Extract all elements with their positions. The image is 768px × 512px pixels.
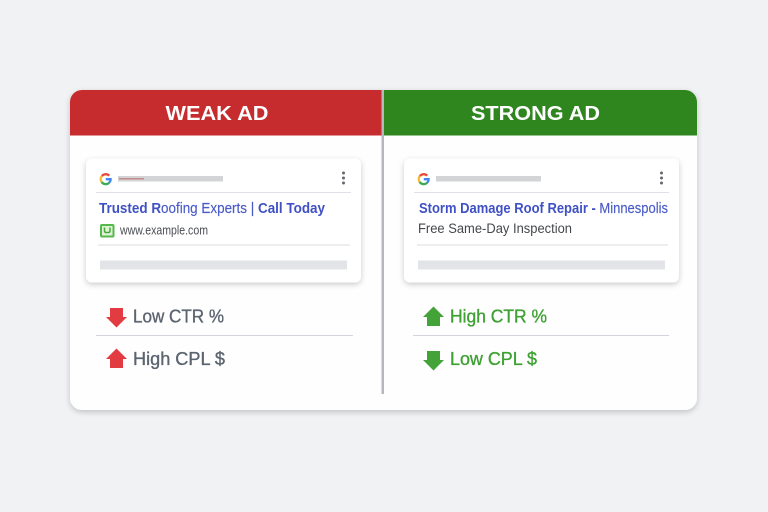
garbled red mark	[119, 178, 144, 180]
ad headline: Storm Damage Roof Repair - Minnespolis	[419, 201, 668, 217]
icon: red down arrow	[106, 308, 127, 328]
header: strong ad: STRONG AD	[471, 102, 600, 125]
metric: high CTR: High CTR %	[450, 306, 547, 326]
url placeholder bar	[436, 176, 541, 182]
header: strong ad	[384, 90, 697, 136]
text placeholder bar	[418, 260, 665, 270]
metric: low CTR: Low CTR %	[133, 306, 224, 326]
icon: green down arrow	[423, 351, 444, 370]
metric: low CTR	[106, 306, 224, 328]
icon: menu dots	[342, 172, 345, 184]
weak ad card	[86, 158, 361, 282]
ad headline: Trusted Roofing Experts | Call Today	[99, 201, 325, 217]
header: weak ad	[70, 90, 382, 136]
header: weak ad: WEAK AD	[166, 102, 268, 125]
icon: menu dots	[660, 172, 663, 184]
ad description: Free Same-Day Inspection	[418, 221, 572, 236]
strong ad card	[404, 158, 679, 282]
metric: low CPL: Low CPL $	[450, 348, 537, 369]
icon: google logo	[101, 174, 111, 184]
metric: low CPL	[423, 348, 537, 370]
weak ad metrics	[96, 306, 353, 369]
metric: high CPL: High CPL $	[133, 348, 225, 369]
center divider	[382, 90, 384, 394]
text placeholder bar	[100, 260, 347, 270]
icon: google logo	[419, 174, 429, 184]
icon: green badge	[101, 225, 114, 236]
icon: red up arrow	[106, 348, 127, 368]
icon: green up arrow	[423, 306, 444, 326]
comparison panel	[70, 90, 697, 410]
url placeholder bar	[118, 176, 223, 182]
strong ad metrics	[413, 306, 669, 370]
ad url: www.example.com	[119, 224, 208, 238]
